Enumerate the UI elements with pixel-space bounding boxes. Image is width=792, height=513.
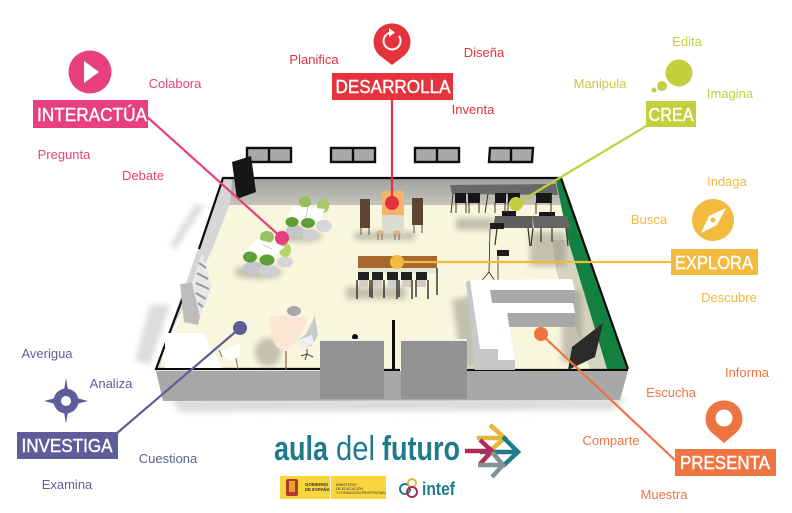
verbs: crea: Manipula	[574, 76, 627, 91]
wall outline	[156, 178, 628, 370]
peach teacher table and chair	[270, 306, 395, 370]
verbs: investiga: Cuestiona	[139, 451, 198, 466]
logo: intef	[400, 479, 456, 499]
heading: desarrolla: DESARROLLA	[336, 77, 450, 97]
section: explora	[631, 174, 758, 305]
section: presenta	[582, 365, 776, 502]
verbs: explora: Busca	[631, 212, 668, 227]
verbs: desarrolla	[289, 45, 505, 117]
dark work tables	[450, 184, 571, 246]
presentation white stage	[466, 279, 575, 370]
verbs: interactúa	[38, 76, 202, 183]
bookcase	[180, 253, 212, 325]
verbs: presenta	[582, 365, 770, 502]
front wall	[156, 371, 628, 401]
verbs: desarrolla: Planifica	[289, 52, 339, 67]
icon: compass star	[44, 378, 88, 424]
hotspot: explora	[390, 255, 404, 269]
verbs: investiga: Analiza	[90, 376, 133, 391]
verbs: investiga: Examina	[42, 477, 93, 492]
hotspot: presenta	[534, 327, 548, 341]
heading: crea: CREA	[648, 105, 694, 125]
icon: location pin	[706, 400, 742, 443]
verbs: crea	[574, 34, 754, 101]
logo: gobierno de españa: GOBIERNO	[305, 482, 329, 487]
section: investiga	[17, 346, 198, 492]
small white table	[218, 343, 240, 369]
heading: interactúa	[33, 100, 148, 128]
hotspot: investiga	[233, 321, 247, 335]
logo: gobierno de españa: MINISTERIO	[336, 483, 357, 487]
presentation screen	[568, 323, 603, 370]
logo: gobierno de españa: DE ESPAÑA	[305, 487, 330, 492]
hotspot: crea	[509, 197, 523, 211]
verbs: explora: Indaga	[707, 174, 748, 189]
verbs: desarrolla: Diseña	[464, 45, 505, 60]
classroom 3D floor plan	[135, 148, 628, 412]
back wall	[224, 178, 566, 205]
long wooden bar with stools	[357, 256, 437, 299]
logo: aula del futuro: futuro	[382, 430, 460, 468]
icon: refresh pin	[374, 23, 410, 65]
white desk	[165, 333, 222, 368]
icon: logo arrows	[465, 425, 518, 477]
verbs: explora: Descubre	[701, 290, 757, 305]
heading: investiga: INVESTIGA	[22, 436, 112, 456]
floor	[160, 200, 612, 369]
heading: presenta: PRESENTA	[680, 453, 770, 473]
logo: aula del futuro	[274, 425, 518, 477]
section: desarrolla	[289, 23, 505, 117]
maker table and benches	[360, 191, 423, 240]
logo: gobierno de españa: Y FORMACIÓN PROFESIONAL	[336, 490, 387, 495]
logo: intef: intef	[422, 479, 456, 499]
camera tripods	[479, 229, 509, 298]
left wall	[156, 178, 232, 368]
verbs: desarrolla: Inventa	[452, 102, 495, 117]
verbs: interactúa: Debate	[122, 168, 164, 183]
icon: compass	[692, 199, 734, 241]
icon: play	[68, 50, 112, 94]
logo: gobierno de españa: DE EDUCACIÓN	[336, 486, 363, 491]
logo: aula del futuro: del	[336, 430, 375, 468]
verbs: interactúa: Colabora	[149, 76, 202, 91]
verbs: presenta: Informa	[725, 365, 770, 380]
verbs: crea: Edita	[672, 34, 703, 49]
icon: thought bubbles	[652, 60, 692, 92]
verbs: presenta: Comparte	[582, 433, 640, 448]
windows	[247, 148, 533, 162]
heading: explora: EXPLORA	[675, 253, 753, 273]
verbs: interactúa: Pregunta	[38, 147, 91, 162]
logo: aula del futuro: aula	[274, 430, 329, 468]
partition panels	[320, 339, 467, 399]
section: crea	[574, 34, 754, 127]
collaborative table group front	[243, 231, 293, 278]
verbs: investiga	[21, 346, 198, 492]
hotspot: interactúa	[275, 231, 289, 245]
collaborative table group back	[286, 196, 332, 241]
verbs: presenta: Muestra	[641, 487, 688, 502]
verbs: investiga: Averigua	[21, 346, 73, 361]
connector lines	[116, 98, 678, 463]
logo: gobierno de españa	[280, 476, 387, 499]
verbs: presenta: Escucha	[646, 385, 697, 400]
heading: interactúa: INTERACTÚA	[37, 104, 147, 125]
right green wall	[556, 177, 628, 369]
verbs: crea: Imagina	[707, 86, 754, 101]
section: interactúa	[33, 50, 202, 183]
outer shadows	[135, 205, 628, 412]
hotspot: desarrolla	[385, 196, 399, 210]
verbs: explora	[631, 174, 757, 305]
floor shadows	[234, 218, 582, 368]
wall display screen	[232, 156, 256, 199]
